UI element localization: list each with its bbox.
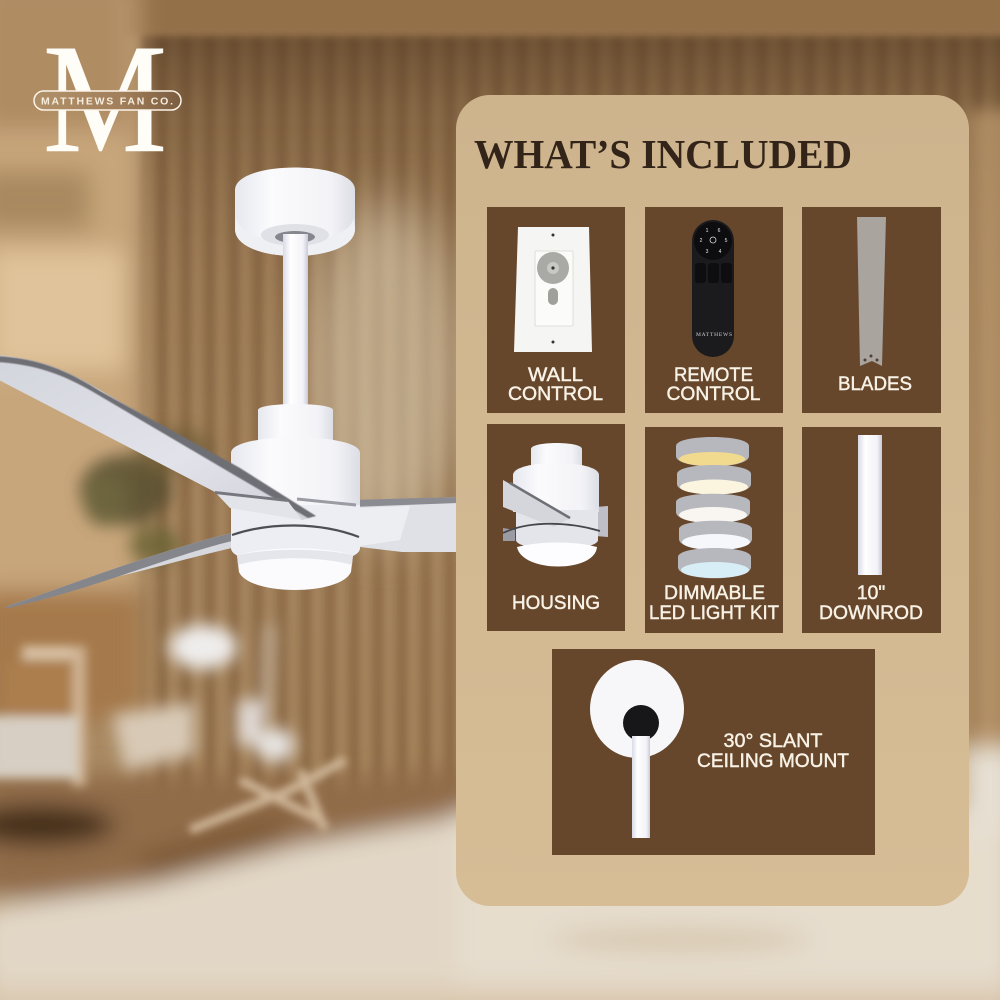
label bbox=[819, 582, 923, 624]
logo name pill: MATTHEWS FAN CO. bbox=[41, 96, 173, 108]
tile: dimmable LED light kit bbox=[645, 427, 783, 633]
icon: remote control: MATTHEWS bbox=[696, 332, 732, 338]
label: CONTROL bbox=[666, 383, 761, 405]
downrod bbox=[283, 234, 308, 408]
label: DIMMABLE bbox=[664, 582, 765, 604]
icon: remote control: 3 bbox=[706, 249, 709, 255]
label: CONTROL bbox=[508, 383, 603, 405]
label bbox=[666, 364, 761, 405]
ceiling canopy bbox=[235, 168, 355, 256]
fan blade: upper left bbox=[0, 355, 316, 520]
icon: remote control: 6 bbox=[718, 228, 721, 234]
background: armchair bbox=[0, 646, 86, 786]
background: plant bbox=[80, 428, 213, 563]
icon: remote control bbox=[692, 220, 734, 357]
label: BLADES bbox=[838, 373, 912, 395]
label bbox=[697, 730, 849, 772]
tile: 30 degree slant ceiling mount bbox=[552, 649, 875, 855]
icon: wall control bbox=[514, 227, 592, 352]
panel: what's included bbox=[456, 95, 969, 906]
background: ceiling band bbox=[120, 0, 1000, 36]
label: LED LIGHT KIT bbox=[649, 602, 779, 624]
background: soft light on slats bbox=[305, 200, 465, 540]
label: CEILING MOUNT bbox=[697, 750, 849, 772]
icon: remote control: 5 bbox=[725, 238, 728, 244]
blade bracket bbox=[215, 492, 302, 520]
label bbox=[508, 364, 603, 405]
icon: housing bbox=[503, 443, 608, 566]
icon: remote control: 2 bbox=[700, 238, 703, 244]
tile: wall control bbox=[487, 207, 625, 413]
label: 10" bbox=[857, 582, 885, 604]
logo: Matthews Fan Co. bbox=[34, 12, 181, 185]
icon: downrod bbox=[858, 435, 882, 575]
background: right wall tone bbox=[968, 110, 1000, 760]
background: wooden slat wall bbox=[140, 30, 1000, 830]
tile: blades bbox=[802, 207, 941, 413]
tile: 10 inch downrod bbox=[802, 427, 941, 633]
icon: remote control: 1 bbox=[706, 228, 709, 234]
tile: remote control bbox=[645, 207, 783, 413]
LED light bbox=[237, 548, 353, 590]
label: HOUSING bbox=[512, 592, 600, 614]
logo monogram M: M bbox=[43, 12, 167, 185]
icon: LED light stack bbox=[676, 437, 752, 578]
background: left beige wall bbox=[0, 0, 140, 720]
fan blade: lower left bbox=[5, 533, 232, 608]
icon: blade bbox=[857, 217, 886, 366]
label: REMOTE bbox=[674, 364, 753, 386]
label: DOWNROD bbox=[819, 602, 923, 624]
label bbox=[649, 582, 779, 624]
icon: ceiling mount bbox=[590, 660, 684, 838]
label: 30° SLANT bbox=[724, 730, 823, 752]
label: WALL bbox=[528, 364, 583, 386]
heading: WHAT’S INCLUDED bbox=[474, 131, 852, 177]
ceiling fan product bbox=[0, 168, 458, 608]
motor trim line bbox=[232, 525, 359, 537]
logo name pill bbox=[34, 91, 181, 110]
background: side table legs bbox=[190, 760, 345, 830]
icon: remote control: 4 bbox=[719, 249, 722, 255]
motor housing bbox=[231, 404, 360, 564]
background: table lamp and decor bbox=[112, 625, 295, 770]
tile: housing bbox=[487, 424, 625, 631]
fan blade: right bbox=[352, 497, 458, 552]
background: floor and rug bbox=[0, 745, 1000, 1000]
